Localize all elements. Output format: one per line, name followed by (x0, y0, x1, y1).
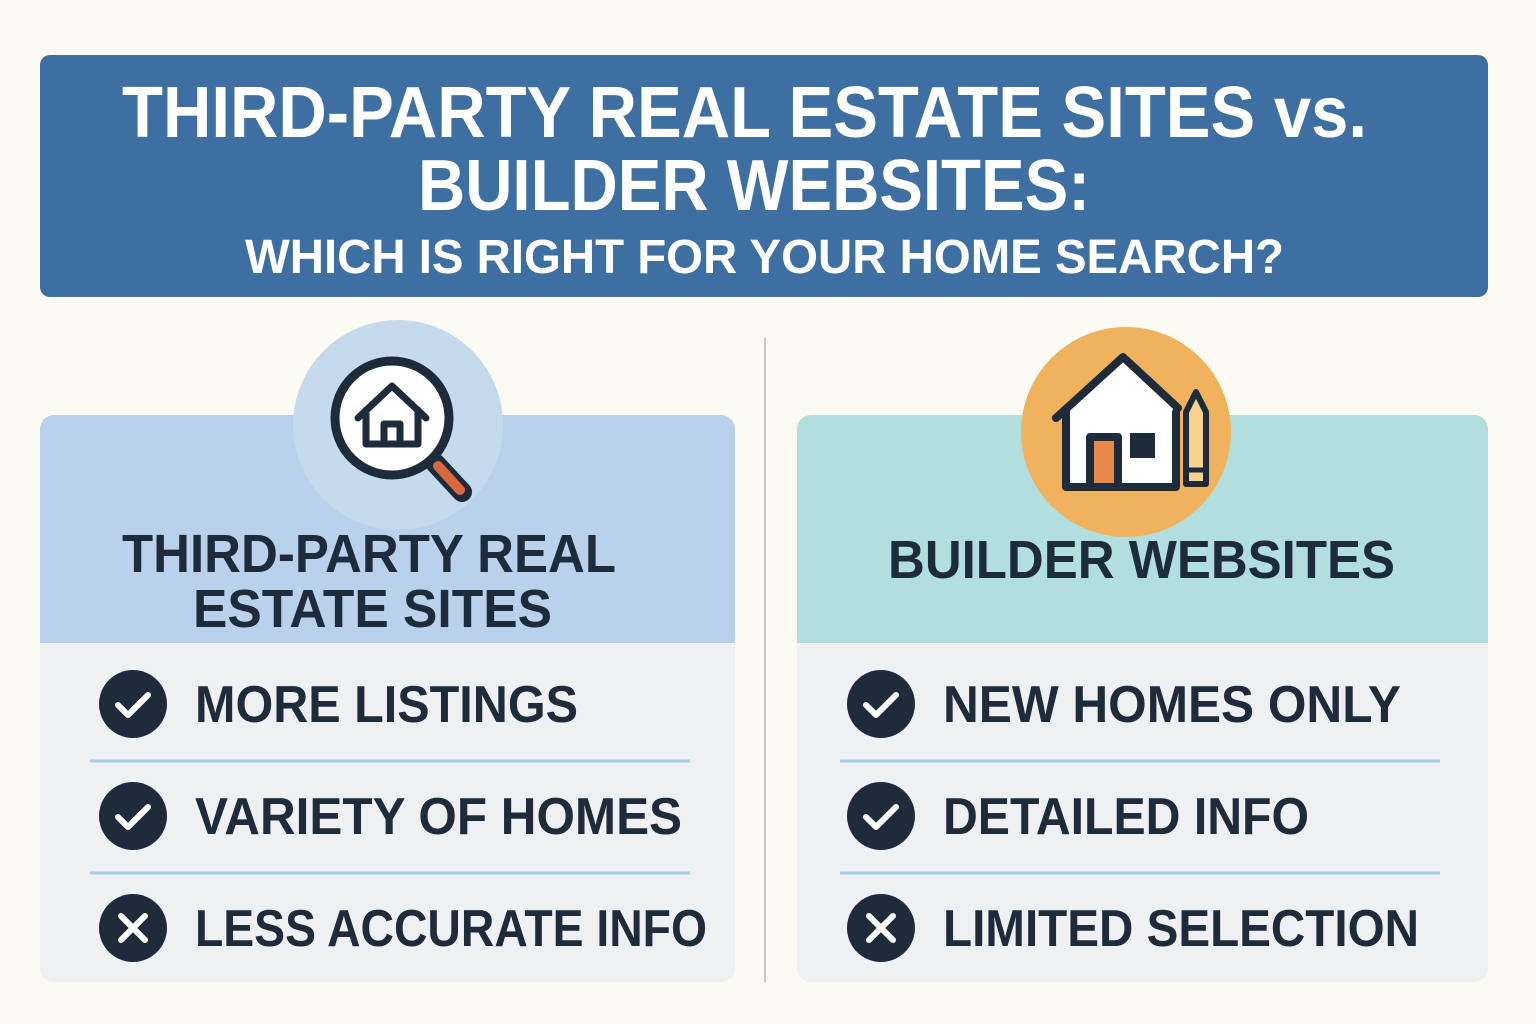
panel: third-party sites (40, 320, 735, 982)
item: more listings (99, 670, 578, 738)
icon: house with pencil (1056, 357, 1206, 487)
item: limited selection: LIMITED SELECTION (943, 900, 1419, 958)
heading: BUILDER WEBSITES (888, 530, 1395, 590)
item: detailed info (847, 782, 1309, 850)
item: less accurate: LESS ACCURATE INFO (195, 900, 707, 958)
item: detailed info: DETAILED INFO (943, 788, 1309, 846)
heading: THIRD-PARTY REAL (122, 524, 616, 584)
item: variety: VARIETY OF HOMES (195, 788, 682, 846)
item: more listings: MORE LISTINGS (195, 676, 578, 734)
panel: builder websites (797, 327, 1488, 982)
item: new homes: NEW HOMES ONLY (943, 676, 1401, 734)
heading (122, 524, 616, 639)
item: new homes (847, 670, 1401, 738)
subtitle: WHICH IS RIGHT FOR YOUR HOME SEARCH? (245, 231, 1284, 284)
item: limited selection (847, 894, 1419, 962)
icon: magnifier house (335, 361, 462, 492)
heading: ESTATE SITES (193, 579, 552, 639)
title: BUILDER WEBSITES: (418, 146, 1090, 226)
title: THIRD-PARTY REAL ESTATE SITES vs. (122, 73, 1367, 153)
item: variety (99, 782, 682, 850)
item: less accurate (99, 894, 707, 962)
title banner (40, 55, 1488, 297)
title (122, 73, 1367, 226)
